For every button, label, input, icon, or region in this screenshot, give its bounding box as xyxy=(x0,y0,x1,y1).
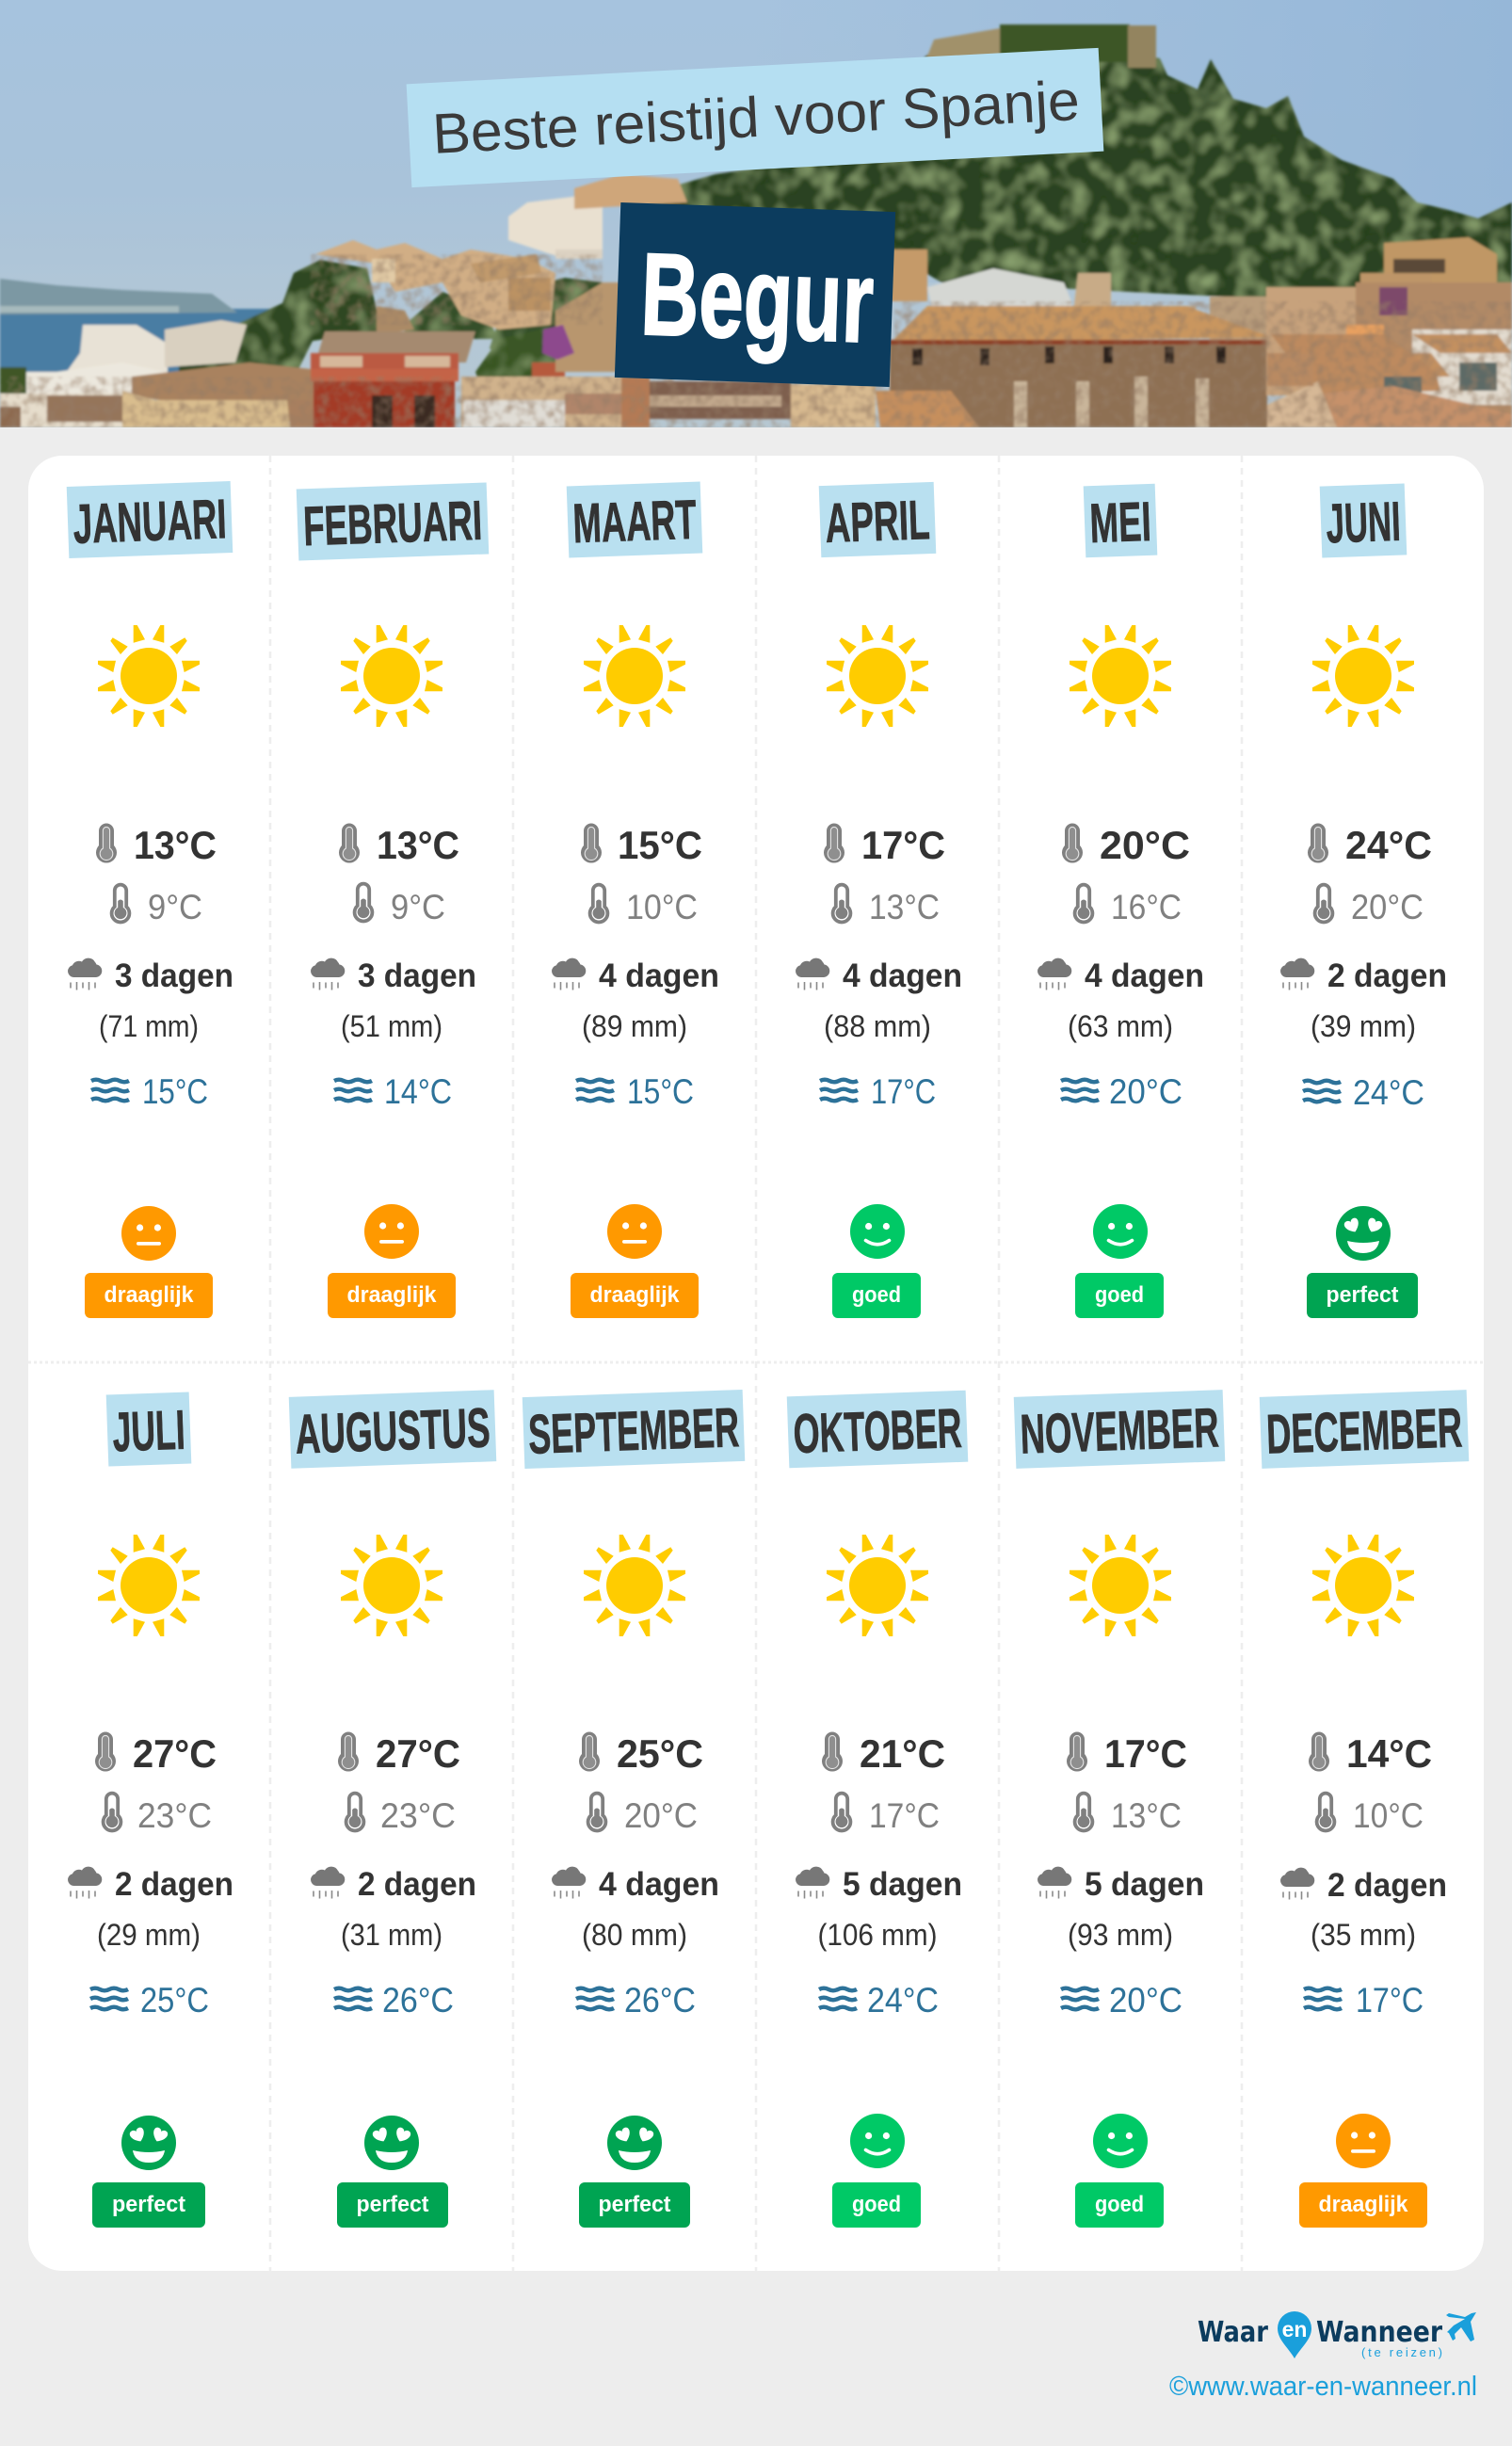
rating: perfect xyxy=(1307,1206,1418,1318)
icon: sun xyxy=(98,1535,200,1636)
month label: JULI xyxy=(111,1399,186,1463)
logo: Waar en Wanneer: Wanneer xyxy=(1316,2316,1442,2349)
sea temperature xyxy=(334,1981,454,2020)
month label: MAART xyxy=(571,489,698,555)
sea temperature xyxy=(576,1072,694,1111)
sea temperature xyxy=(334,1072,452,1111)
rating: goed xyxy=(1075,2114,1164,2228)
minimum temperature: 9°C xyxy=(391,888,445,926)
month: september xyxy=(523,1390,745,2228)
rain days: 3 dagen xyxy=(115,957,233,994)
rainfall: (89 mm) xyxy=(582,1009,687,1043)
minimum temperature: 9°C xyxy=(148,888,202,926)
sea temperature xyxy=(819,1981,939,2020)
sea temperature: 24°C xyxy=(1353,1073,1424,1112)
rating: goed: goed xyxy=(852,2192,901,2217)
minimum temperature xyxy=(355,884,445,926)
rain days xyxy=(1280,957,1447,994)
sea temperature xyxy=(576,1981,696,2020)
maximum temperature xyxy=(1308,823,1432,867)
month label: SEPTEMBER xyxy=(527,1396,740,1466)
minimum temperature: 10°C xyxy=(626,888,698,926)
rain days xyxy=(311,1866,476,1903)
month label: OKTOBER xyxy=(792,1397,963,1465)
icon: sun xyxy=(827,1535,928,1636)
maximum temperature xyxy=(579,1731,703,1776)
maximum temperature: 17°C xyxy=(861,823,945,867)
rainfall: (106 mm) xyxy=(817,1918,938,1952)
rating: perfect: perfect xyxy=(112,2192,185,2217)
rain days: 4 dagen xyxy=(843,957,962,994)
rating: draaglijk: draaglijk xyxy=(104,1282,194,1308)
rain days: 5 dagen xyxy=(1085,1866,1204,1903)
month: november xyxy=(1014,1390,1225,2228)
minimum temperature xyxy=(833,1794,940,1835)
minimum temperature: 23°C xyxy=(137,1796,212,1835)
minimum temperature xyxy=(833,885,940,926)
month label: JUNI xyxy=(1325,491,1402,555)
month label: NOVEMBER xyxy=(1019,1396,1220,1466)
minimum temperature xyxy=(1075,885,1182,926)
sea temperature: 20°C xyxy=(1109,1072,1182,1111)
rain days: 2 dagen xyxy=(115,1866,233,1903)
maximum temperature: 24°C xyxy=(1345,823,1432,867)
maximum temperature xyxy=(1067,1731,1187,1776)
maximum temperature xyxy=(338,1731,460,1776)
month label xyxy=(819,482,936,557)
minimum temperature: 16°C xyxy=(1111,888,1182,926)
rating: draaglijk xyxy=(85,1206,213,1318)
rating: draaglijk xyxy=(1299,2114,1427,2228)
rain days: 2 dagen xyxy=(1327,957,1447,994)
sea temperature xyxy=(1304,1981,1424,2020)
maximum temperature: 13°C xyxy=(377,823,459,867)
column and row dividers xyxy=(28,456,1484,2271)
minimum temperature xyxy=(112,885,202,926)
sea temperature xyxy=(1061,1981,1182,2020)
rainfall: (93 mm) xyxy=(1068,1918,1173,1952)
maximum temperature xyxy=(822,1731,945,1776)
title banner: Beste reistijd voor Spanje xyxy=(431,69,1081,166)
icon: sun xyxy=(98,625,200,727)
minimum temperature xyxy=(588,1794,698,1835)
maximum temperature xyxy=(581,823,702,867)
sea temperature: 15°C xyxy=(142,1072,208,1111)
rainfall: (29 mm) xyxy=(97,1918,201,1952)
month label xyxy=(787,1391,968,1468)
icon: sun xyxy=(584,1535,685,1636)
website credit: ©www.waar-en-wanneer.nl xyxy=(1169,2372,1477,2402)
header photo: Begur hill town xyxy=(0,0,1512,427)
title banner xyxy=(407,48,1103,187)
sea temperature: 26°C xyxy=(624,1981,696,2020)
rainfall: (80 mm) xyxy=(582,1918,687,1952)
sea temperature xyxy=(90,1981,209,2020)
rain days xyxy=(1037,1866,1204,1903)
month label xyxy=(67,481,233,558)
logo: Waar en Wanneer xyxy=(1198,2311,1476,2359)
minimum temperature: 23°C xyxy=(380,1796,456,1835)
rain days: 4 dagen xyxy=(1085,957,1204,994)
month label xyxy=(1320,483,1407,558)
month: mei xyxy=(1037,484,1204,1318)
logo: Waar en Wanneer: Waar xyxy=(1198,2316,1268,2349)
icon: sun xyxy=(341,1535,442,1636)
month label: AUGUSTUS xyxy=(294,1396,491,1466)
city name banner: Begur xyxy=(639,230,876,367)
icon: sun xyxy=(1312,625,1414,727)
minimum temperature: 13°C xyxy=(1111,1796,1182,1835)
month label: JANUARI xyxy=(72,488,228,555)
maximum temperature: 25°C xyxy=(617,1731,703,1776)
sea temperature: 24°C xyxy=(867,1981,939,2020)
icon: sun xyxy=(1312,1535,1414,1636)
rain days: 5 dagen xyxy=(843,1866,962,1903)
minimum temperature: 10°C xyxy=(1353,1796,1424,1835)
rating: perfect: perfect xyxy=(599,2192,671,2217)
month label xyxy=(106,1392,191,1467)
sea temperature xyxy=(1303,1073,1424,1112)
month label: APRIL xyxy=(824,489,931,555)
rainfall: (31 mm) xyxy=(341,1918,442,1952)
maximum temperature: 21°C xyxy=(860,1731,945,1776)
rain days: 2 dagen xyxy=(358,1866,476,1903)
icon: sun xyxy=(584,625,685,727)
sea temperature: 17°C xyxy=(871,1072,936,1111)
rating: goed: goed xyxy=(1095,2192,1144,2217)
rain days: 2 dagen xyxy=(1327,1867,1447,1904)
icon: map pin xyxy=(1278,2311,1311,2358)
icon: sun xyxy=(827,625,928,727)
maximum temperature xyxy=(824,823,945,867)
white panel xyxy=(28,456,1484,2271)
minimum temperature: 13°C xyxy=(869,888,940,926)
rating: goed xyxy=(832,2114,921,2228)
maximum temperature xyxy=(96,823,217,867)
minimum temperature xyxy=(104,1794,212,1835)
maximum temperature xyxy=(339,823,459,867)
maximum temperature: 13°C xyxy=(134,823,217,867)
rain days xyxy=(68,957,233,994)
rain days xyxy=(796,1866,962,1903)
rating: perfect: perfect xyxy=(356,2192,429,2217)
month label xyxy=(297,482,489,561)
rainfall: (71 mm) xyxy=(99,1009,199,1043)
month: april xyxy=(796,482,962,1318)
rainfall: (39 mm) xyxy=(1311,1009,1416,1043)
rain days xyxy=(1280,1867,1447,1904)
rain days: 3 dagen xyxy=(358,957,476,994)
rainfall: (35 mm) xyxy=(1311,1918,1416,1952)
maximum temperature: 27°C xyxy=(376,1731,460,1776)
sea temperature xyxy=(1061,1072,1182,1111)
rain days xyxy=(311,957,476,994)
maximum temperature: 17°C xyxy=(1104,1731,1187,1776)
month label xyxy=(1084,484,1157,557)
month: maart xyxy=(552,482,719,1318)
sea temperature: 25°C xyxy=(140,1981,209,2020)
rating: perfect xyxy=(337,2116,448,2228)
month: juni xyxy=(1280,483,1447,1318)
rating: perfect xyxy=(92,2116,205,2228)
month label xyxy=(1014,1390,1225,1469)
rating: goed xyxy=(832,1204,921,1318)
minimum temperature xyxy=(346,1794,456,1835)
sea temperature xyxy=(91,1072,208,1111)
rating: draaglijk: draaglijk xyxy=(346,1282,437,1308)
icon: sun xyxy=(1070,1535,1171,1636)
maximum temperature xyxy=(1309,1731,1432,1776)
maximum temperature xyxy=(1062,823,1190,867)
minimum temperature xyxy=(590,885,698,926)
month label: FEBRUARI xyxy=(302,490,483,557)
city name banner xyxy=(615,202,895,387)
maximum temperature: 20°C xyxy=(1100,823,1190,867)
month label xyxy=(567,482,702,557)
month: december xyxy=(1260,1390,1469,2228)
month: augustus xyxy=(289,1390,496,2228)
sea temperature xyxy=(820,1072,936,1111)
icon: map pin: en xyxy=(1282,2317,1307,2341)
minimum temperature: 20°C xyxy=(1351,888,1424,926)
icon: sun xyxy=(1070,625,1171,727)
month label: MEI xyxy=(1088,491,1152,555)
month label xyxy=(289,1390,496,1469)
logo: Waar en Wanneer: (te reizen) xyxy=(1361,2345,1442,2359)
minimum temperature xyxy=(1315,885,1424,926)
icon: sun xyxy=(341,625,442,727)
month label xyxy=(523,1390,745,1469)
sea temperature: 17°C xyxy=(1356,1981,1424,2020)
maximum temperature: 15°C xyxy=(618,823,702,867)
month: juli xyxy=(68,1392,233,2228)
rating: draaglijk xyxy=(328,1204,456,1318)
month: oktober xyxy=(787,1391,968,2228)
minimum temperature xyxy=(1075,1794,1182,1835)
rainfall: (88 mm) xyxy=(824,1009,931,1043)
rain days: 4 dagen xyxy=(599,1866,719,1903)
rating: goed xyxy=(1075,1204,1164,1318)
minimum temperature xyxy=(1317,1794,1424,1835)
minimum temperature: 17°C xyxy=(869,1796,940,1835)
rating: draaglijk xyxy=(571,1204,699,1318)
maximum temperature: 14°C xyxy=(1346,1731,1432,1776)
rain days xyxy=(68,1866,233,1903)
rating: draaglijk: draaglijk xyxy=(589,1282,680,1308)
rating: perfect xyxy=(579,2116,690,2228)
sea temperature: 14°C xyxy=(384,1072,452,1111)
sea temperature: 20°C xyxy=(1109,1981,1182,2020)
rainfall: (63 mm) xyxy=(1068,1009,1173,1043)
rating: perfect: perfect xyxy=(1326,1282,1399,1308)
rainfall: (51 mm) xyxy=(341,1009,442,1043)
sea temperature: 26°C xyxy=(382,1981,454,2020)
rating: goed: goed xyxy=(1095,1282,1144,1308)
rain days xyxy=(1037,957,1204,994)
icon: plane xyxy=(1446,2312,1476,2341)
rating: goed: goed xyxy=(852,1282,901,1308)
maximum temperature: 27°C xyxy=(133,1731,217,1776)
month: februari xyxy=(297,482,489,1318)
minimum temperature: 20°C xyxy=(624,1796,698,1835)
rain days xyxy=(796,957,962,994)
rating: draaglijk: draaglijk xyxy=(1318,2192,1408,2217)
month: januari xyxy=(67,481,233,1318)
sea temperature: 15°C xyxy=(627,1072,694,1111)
rain days: 4 dagen xyxy=(599,957,719,994)
maximum temperature xyxy=(95,1731,217,1776)
